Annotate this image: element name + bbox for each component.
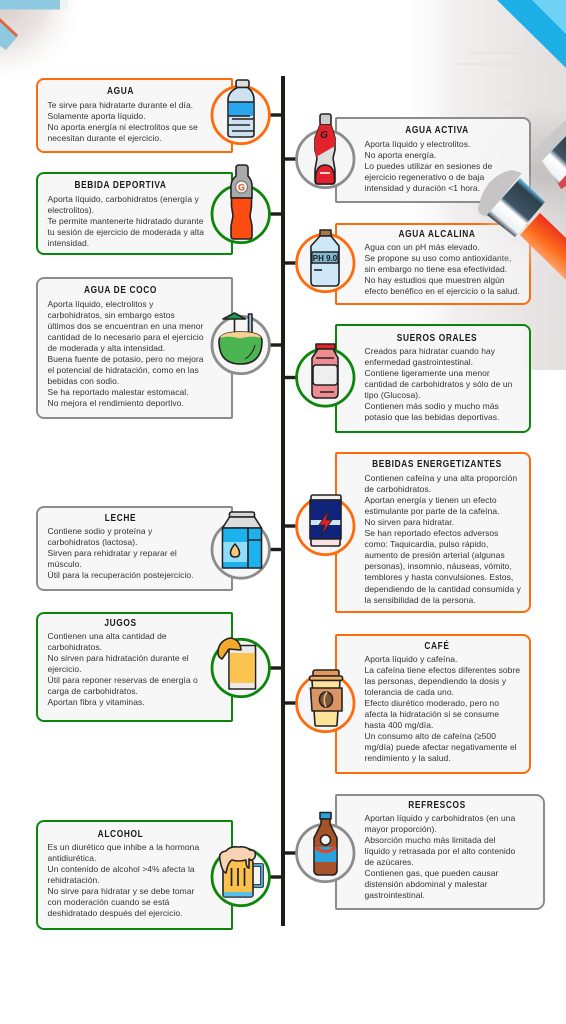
panel: leche <box>36 506 233 591</box>
text: agua de coco <box>48 299 204 408</box>
icon: alkaline water bottle: PH 9.0 <box>313 254 338 263</box>
text: sueros orales: Contiene ligeramente una menor <box>364 368 490 378</box>
icon: water bottle <box>212 80 282 144</box>
text: bebidas energetizantes: aumento de presión arterial (algunas <box>364 550 505 560</box>
icon: beer mug <box>212 847 282 906</box>
text: alcohol: rehidratación. <box>48 875 100 885</box>
text: bebida deportiva <box>48 194 204 248</box>
icon: agua activa bottle <box>285 114 354 188</box>
text: agua: No aporta energía ni electrolitos que se <box>48 122 198 132</box>
text: café: La cafeína tiene efectos diferentes sobre <box>364 665 520 675</box>
text: sueros orales: Contienen más sodio y mucho más <box>364 401 499 411</box>
text: sueros orales: cantidad de carbohidratos y sólo de un <box>364 379 512 389</box>
panel: jugos <box>36 612 233 722</box>
timeline spine <box>281 76 285 926</box>
text: agua de coco: No mejora el rendimiento deportivo. <box>48 398 184 408</box>
text: leche: carbohidratos (lactosa). <box>48 537 138 547</box>
panel: bebida deportiva <box>36 172 233 255</box>
text: bebidas energetizantes: la sensibilidad de la persona. <box>364 595 476 605</box>
panel: bebidas energetizantes <box>335 452 531 613</box>
text: alcohol: antidiurética. <box>48 853 96 863</box>
heading: agua: AGUA <box>107 86 134 97</box>
heading: bebidas energetizantes: BEBIDAS ENERGETIZANTES <box>372 459 502 470</box>
text: agua alcalina: No hay estudios que muestren algún <box>364 275 505 285</box>
text: refrescos: Aportan líquido y carbohidratos (en una <box>364 813 515 823</box>
text: leche: Sirven para rehidratar y reparar el <box>48 548 177 558</box>
text: refrescos: distensión abdominal y malestar <box>364 879 487 889</box>
text: agua de coco: carbohidratos, sin embargo estos <box>48 310 175 320</box>
text: alcohol: con moderación cuando se está <box>48 897 169 907</box>
text: bebidas energetizantes: personas), insomnio, náuseas, vómito, <box>364 561 512 571</box>
icon: milk carton <box>212 512 282 578</box>
text: bebidas energetizantes: Se han reportado efectos adversos <box>364 528 498 538</box>
text: agua alcalina: sin embargo no tiene esa efectividad. <box>364 264 507 274</box>
text: agua de coco: de moderada y alta intensidad. <box>48 343 165 353</box>
text: leche: músculo. <box>48 559 82 569</box>
text: agua alcalina: Se propone su uso como antioxidante, <box>364 253 511 263</box>
text: alcohol: deshidratado después del ejercicio. <box>48 908 183 918</box>
icon: coconut <box>212 313 282 374</box>
text: alcohol <box>48 842 200 918</box>
text: agua de coco: Buena fuente de potasio, pero no mejora <box>48 354 204 364</box>
text: agua: necesitan durante el ejercicio. <box>48 133 162 143</box>
heading: agua de coco: AGUA DE COCO <box>84 285 157 296</box>
text: jugos <box>48 631 198 707</box>
text: jugos: Útil para reponer reservas de energía o <box>48 675 198 685</box>
text: jugos: carbohidratos. <box>48 642 102 652</box>
icon: juice glass <box>212 638 282 697</box>
panel: agua activa <box>335 117 531 203</box>
text: agua activa: intensidad y duración <1 hora. <box>364 183 480 193</box>
heading: agua activa: AGUA ACTIVA <box>405 125 469 136</box>
text: sueros orales: Creados para hidratar cuando hay <box>364 346 495 356</box>
text: leche: Contiene sodio y proteína y <box>48 526 152 536</box>
text: agua activa: Aporta líquido y electrolitos. <box>364 139 470 149</box>
text: café <box>364 654 520 763</box>
text: agua: Solamente aporta líquido. <box>48 111 146 121</box>
text: bebida deportiva: Te permite mantenerte hidratado durante <box>48 216 204 226</box>
text: bebidas energetizantes: como: Taquicardia, pulso rápido, <box>364 539 488 549</box>
panel: alcohol <box>36 820 233 930</box>
text: café: rendimiento y la salud. <box>364 753 451 763</box>
heading: café: CAFÉ <box>424 641 450 652</box>
text: bebidas energetizantes: temblores y hasta convulsiones. Estos, <box>364 572 513 582</box>
text: jugos: carga de carbohidratos. <box>48 686 138 696</box>
text: refrescos: gastrointestinal. <box>364 890 425 900</box>
text: jugos: Aportan fibra y vitaminas. <box>48 697 145 707</box>
text: café: afecta la hidratación si se consume <box>364 709 499 719</box>
text: refrescos <box>364 813 516 900</box>
dumbbell: back <box>533 120 566 189</box>
icon: alkaline water bottle <box>285 230 354 292</box>
text: agua activa: No aporta energía. <box>364 150 436 160</box>
text: bebidas energetizantes: Aportan energía y tienen un efecto <box>364 495 497 505</box>
text: leche <box>48 526 194 580</box>
icon: coffee cup <box>285 670 354 732</box>
text: sueros orales: potasio que las bebidas deportivas. <box>364 412 500 422</box>
text: café: Un consumo alto de cafeína (≥500 <box>364 731 496 741</box>
heading: sueros orales: SUEROS ORALES <box>397 333 477 344</box>
text: bebida deportiva: tu sesión de ejercicio de moderada y alta <box>48 227 204 237</box>
text: agua de coco: Se ha reportado malestar estomacal. <box>48 387 189 397</box>
panel: sueros orales <box>335 324 531 433</box>
text: bebida deportiva: Aporta líquido, carbohidratos (energía y <box>48 194 199 204</box>
text: alcohol: No sirve para hidratar y se debe tomar <box>48 886 194 896</box>
heading: jugos: JUGOS <box>104 618 137 629</box>
text: agua <box>48 100 198 143</box>
text: jugos: No sirven para hidratación durante el <box>48 653 189 663</box>
text: agua: Te sirve para hidratarte durante el día. <box>48 100 193 110</box>
text: agua alcalina: Agua con un pH más elevado. <box>364 242 480 252</box>
text: refrescos: mayor proporción). <box>364 824 437 834</box>
heading: leche: LECHE <box>105 513 136 524</box>
text: agua alcalina <box>364 242 520 296</box>
icon: agua activa bottle: G <box>320 130 328 141</box>
text: alcohol: Es un diurético que inhibe a la hormona <box>48 842 199 852</box>
text: agua activa: ejercicio regenerativo o de baja <box>364 172 484 182</box>
text: bebidas energetizantes: dependiendo de la cantidad consumida y <box>364 584 521 594</box>
icon: soda bottle <box>285 812 354 882</box>
text: agua de coco: últimos dos se encuentran en una menor <box>48 321 203 331</box>
text: bebida deportiva: electrolitos). <box>48 205 94 215</box>
text: agua activa: Lo puedes utilizar en sesiones de <box>364 161 492 171</box>
panel: refrescos <box>335 794 545 910</box>
text: bebidas energetizantes: No sirven para hidratar. <box>364 517 454 527</box>
panel: agua <box>36 78 233 153</box>
icon: oral serum bottle <box>285 344 354 406</box>
heading: refrescos: REFRESCOS <box>408 800 466 811</box>
text: agua activa <box>364 139 492 193</box>
dumbbell: front <box>478 170 566 280</box>
text: alcohol: Un contenido de alcohol >4% afecta la <box>48 864 195 874</box>
text: agua de coco: Aporta líquido, electrolitos y <box>48 299 153 309</box>
text: jugos: Contienen una alta cantidad de <box>48 631 167 641</box>
text: refrescos: Contienen gas, que pueden causar <box>364 868 498 878</box>
text: refrescos: Absorción mucho más limitada del <box>364 835 496 845</box>
text: agua de coco: el potencial de hidratación, como en las <box>48 365 199 375</box>
text: sueros orales: tipo (Glucosa). <box>364 390 421 400</box>
icon: energy drink can <box>285 495 354 555</box>
text: café: tolerancia de cada uno. <box>364 687 454 697</box>
heading: agua alcalina: AGUA ALCALINA <box>398 229 476 240</box>
text: sueros orales <box>364 346 512 422</box>
text: bebidas energetizantes: de carbohidratos. <box>364 484 431 494</box>
text: bebida deportiva: intensidad. <box>48 238 89 248</box>
icon: sports drink bottle <box>212 165 282 243</box>
text: café: Efecto diurético moderado, pero no <box>364 698 499 708</box>
text: bebidas energetizantes: Contienen cafeína y una alta proporción <box>364 473 517 483</box>
text: agua de coco: bebidas con sodio. <box>48 376 119 386</box>
heading: bebida deportiva: BEBIDA DEPORTIVA <box>74 180 167 191</box>
panel: agua de coco <box>36 277 233 419</box>
icon: sports drink bottle: G <box>238 182 245 192</box>
text: café: Aporta líquido y cafeína. <box>364 654 457 664</box>
text: agua alcalina: efecto benéfico en el ejercicio o la salud. <box>364 286 520 296</box>
text: refrescos: de azúcares. <box>364 857 414 867</box>
text: refrescos: líquido y retrasada por el alto contenido <box>364 846 515 856</box>
text: bebidas energetizantes: estimulante por parte de la cafeína. <box>364 506 500 516</box>
text: agua de coco: cantidad de lo necesario para el ejercicio <box>48 332 204 342</box>
text: sueros orales: enfermedad gastrointestinal. <box>364 357 473 367</box>
text: leche: Útil para la recuperación postejercicio. <box>48 570 194 580</box>
panel: café <box>335 634 531 774</box>
text: jugos: ejercicio. <box>48 664 82 674</box>
text: café: las personas, dependiendo la dosis y <box>364 676 506 686</box>
text: bebidas energetizantes <box>364 473 521 605</box>
panel: agua alcalina <box>335 223 531 305</box>
heading: alcohol: ALCOHOL <box>98 829 143 840</box>
text: café: mg/día) puede afectar negativamente el <box>364 742 517 752</box>
text: café: hasta 400 mg/día. <box>364 720 433 730</box>
